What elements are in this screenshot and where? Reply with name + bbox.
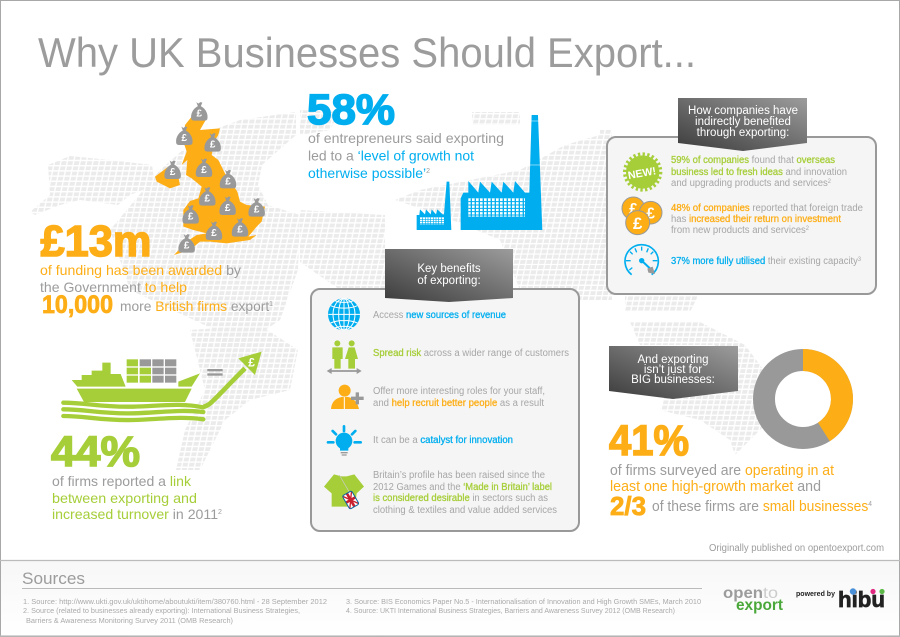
small factory [417,182,451,230]
benefit texts: is considered desirable in sectors such as [373,493,548,504]
icon: person with plus [331,385,364,409]
banner: not just big businesses [609,346,738,399]
panel icons [622,154,662,275]
benefit icons [324,298,364,509]
benefit texts: 2012 Games and the ‘Made in Britain’ label [373,482,552,493]
large factory [461,115,542,230]
text: turnover description: increased turnover in 2011 [52,506,218,522]
logo: open to export: open [723,585,763,602]
icons: money bags: £ [184,241,190,252]
panel texts: 37% more fully utilised their existing capacity [671,256,864,267]
footer: sources [0,560,900,636]
text: entrepreneurs description: 2 [426,168,430,175]
icon: pound coins: £ [629,201,638,218]
containers [127,359,176,383]
panel background [607,137,876,294]
text: funding description [40,262,273,319]
text: turnover description: 2 [218,509,222,516]
logo: powered by hibu [796,587,885,612]
benefit texts: Access new sources of revenue [373,310,506,321]
banner: not just big businesses: And exporting [638,354,708,366]
icons: money bags: £ [225,176,231,187]
panel texts: from new products and services [671,225,812,236]
icons: money bags: £ [201,165,207,176]
benefit texts: and help recruit better people as a result [373,398,544,409]
icons: money bags: £ [225,203,231,214]
text: firms surveyed [610,463,872,521]
icon: light bulb [328,426,361,455]
icon: new badge: NEW! [627,165,657,182]
stat: 58% [307,86,504,181]
logo: powered by hibu: powered by [796,589,836,598]
credit line: Originally published on opentoexport.com [709,543,884,554]
ship superstructure [72,363,126,387]
icons: money bags: £ [188,212,194,223]
text: turnover description: of firms reported a link [52,473,192,489]
background dotted world map [30,110,775,470]
icon: pound coins: £ [633,214,643,233]
ship hull [77,389,192,402]
source list: Barriers & Awareness Monitoring Survey 2011 (OMB Research) [26,616,233,625]
text: firms surveyed: of firms surveyed are operating in at [610,463,834,479]
benefit texts: Spread risk across a wider range of customers [373,348,569,359]
panel texts: and upgrading products and services [671,178,835,189]
icon: globe [328,298,360,330]
figure: 58%: 58% [307,86,395,134]
benefit texts: Britain’s profile has been raised since the [373,470,545,481]
factories icon [417,115,542,230]
icon: Great Britain [174,117,265,255]
growth arrow: £ [248,356,255,370]
banner: not just big businesses: isn’t just for [644,364,702,376]
text: funding description: 10,000 [42,291,113,319]
source list: 2. Source (related to businesses already exporting): International Business Strategies, [23,606,300,615]
banner: indirect benefits heading: through exporting: [697,127,789,139]
panel: key benefits [311,249,579,531]
text: entrepreneurs description [308,130,504,181]
text: funding description: 1 [269,301,273,308]
text: funding description: of funding has been awarded by [40,262,241,278]
icons: money bags: £ [237,225,243,236]
source list: 3. Source: BIS Economics Paper No.5 - Internationalisation of Innovation and High Growth SMEs, March 2010 [346,597,701,606]
icons: money bags: £ [205,194,211,205]
icon: Northern Ireland [155,167,180,188]
text: funding description: the Government to help [40,279,187,295]
panel texts: 59% of companies found that overseas [671,155,835,166]
source list [23,597,701,625]
banner: not just big businesses: BIG businesses: [631,374,715,386]
banner: key benefits heading [385,249,513,302]
figure: 41%: 41% [609,417,689,465]
benefit texts: clothing & textiles and value added services [373,505,557,516]
equals sign [207,369,223,376]
text: turnover description [52,473,222,522]
title: Why UK Businesses Should Export... [38,29,696,76]
icon: pound coins: £ [646,205,655,222]
icons: money bags: £ [197,109,203,120]
banner: indirect benefits heading: How companies have [688,105,798,117]
logo: open to export: export [736,597,784,614]
UK map with money bags [155,102,265,255]
panel texts: business led to fresh ideas and innovation [671,167,847,178]
icon: two people with arrow [327,340,362,374]
panel background [311,289,579,531]
panel: indirect benefits [607,98,876,294]
text: turnover description: between exporting and [52,490,197,506]
icon: t-shirt with tag [324,474,364,509]
figure: £13m: £13m [40,217,152,266]
logo: open to export: to [763,585,778,602]
icons: money bags: £ [210,140,216,151]
logo: open to export [723,585,784,614]
icons: money bags: £ [254,205,260,216]
icons: money bags: £ [211,228,217,239]
source list: 1. Source: http://www.ukti.gov.uk/uktihome/aboutukti/item/380760.html - 28 September 2012 [23,597,327,606]
heading: sources: Sources [22,569,85,588]
stat: £13m funding [40,217,273,319]
icons: money bags: £ [182,133,188,144]
ship bow [178,373,200,387]
text: firms surveyed: least one high-growth market and [610,479,821,495]
banner: key benefits heading: of exporting: [417,275,481,287]
text: firms surveyed: 2/3 [610,491,646,521]
icon: speedometer [625,245,658,275]
banner: indirect benefits heading [678,98,807,151]
panel texts: has increased their return on investment [671,214,841,225]
icon: pound coins [622,197,662,235]
panel texts: 2 [828,179,832,185]
benefit texts: Offer more interesting roles for your staff, [373,386,545,397]
text: firms surveyed: of these firms are small businesses [652,499,873,515]
text: funding description: more British firms export [120,298,270,314]
text: entrepreneurs description: otherwise possible’ [308,165,426,181]
panel texts: 48% of companies reported that foreign trade [671,203,863,214]
donut chart: 41% [764,349,853,441]
source list: 4. Source: UKTI International Business Strategies, Barriers and Awareness Survey 2012 (OMB Research) [346,606,675,615]
logo: powered by hibu: hibu [838,587,885,612]
banner: indirect benefits heading: indirectly benefited [695,116,791,128]
panel texts [671,155,863,267]
benefit texts: It can be a catalyst for innovation [373,435,513,446]
figure: 44%: 44% [51,428,140,476]
stat: 41% [609,417,872,521]
footer background [1,560,899,636]
icons: money bags: £ [170,167,176,178]
text: entrepreneurs description: of entrepreneurs said exporting [308,130,504,146]
text: entrepreneurs description: led to a ‘level of growth not [308,148,474,164]
growth arrow [203,352,262,407]
banner: key benefits heading: Key benefits [417,263,481,275]
text: firms surveyed: 4 [868,501,872,508]
icons: money bags [164,102,265,253]
panel texts: 3 [858,257,862,263]
ship with growth arrow [63,352,262,420]
stat: 44% [51,428,222,522]
benefit texts [373,310,569,516]
panel texts: 2 [806,226,810,232]
waves [63,403,203,420]
